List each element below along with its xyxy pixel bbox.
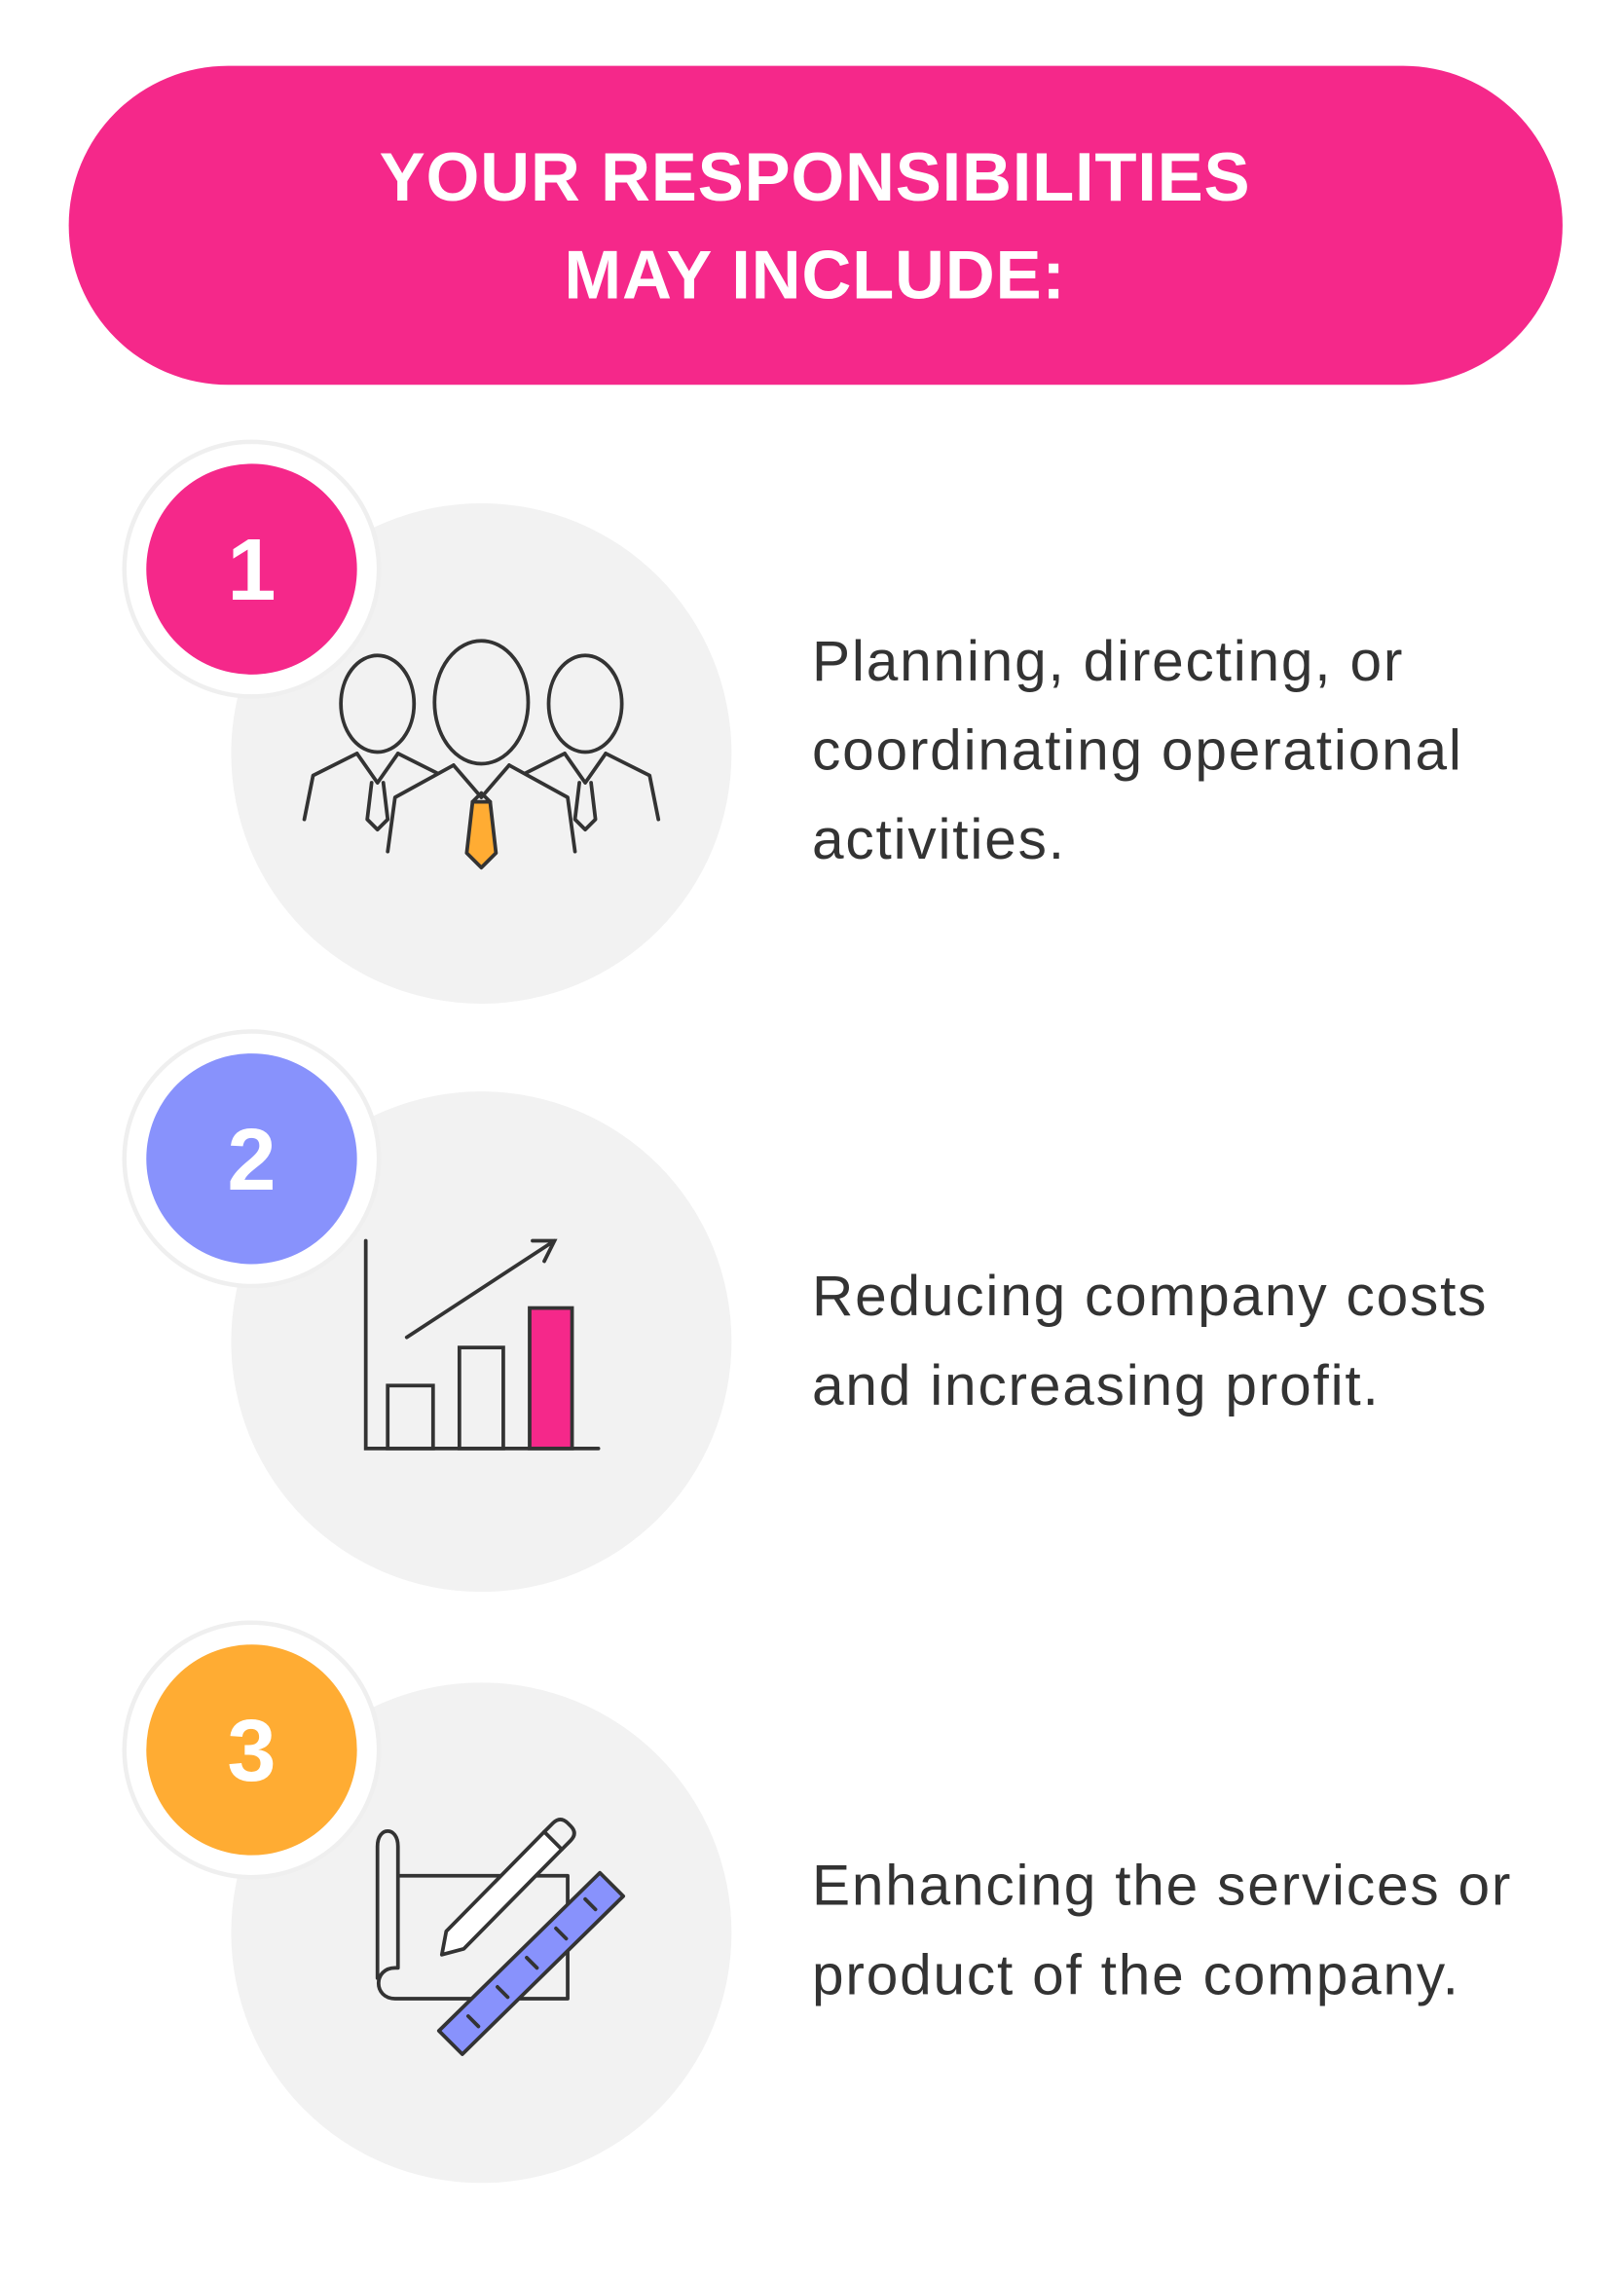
icon: blueprint with pencil and ruler (378, 1820, 623, 2054)
gray circle 1 (231, 503, 731, 1004)
item 1 (125, 442, 1481, 1004)
text 3: Enhancing the services or (812, 1855, 1512, 1918)
number badge 2: 2 (227, 1111, 277, 1209)
item 2 (125, 1032, 1505, 1592)
item 3 (125, 1623, 1530, 2183)
text 2: and increasing profit. (812, 1354, 1381, 1417)
text 2: Reducing company costs (812, 1265, 1488, 1328)
text 1: activities. (812, 808, 1066, 871)
number badge 3 (125, 1623, 379, 1877)
icon: bar chart with arrow (366, 1240, 599, 1449)
number badge 1 (125, 442, 379, 696)
gray circle 3 (231, 1682, 731, 2183)
text 1: coordinating operational (812, 719, 1463, 783)
text 1: Planning, directing, or (812, 630, 1404, 693)
gray circle 2 (231, 1091, 731, 1592)
icon: team of people (305, 641, 658, 867)
text 3: product of the company. (812, 1943, 1460, 2006)
title: YOUR RESPONSIBILITIES (380, 138, 1250, 215)
number badge 2 (125, 1032, 379, 1286)
number badge 1: 1 (227, 521, 277, 619)
header pill: MAY INCLUDE: (564, 237, 1066, 313)
number badge 3: 3 (227, 1702, 277, 1800)
header pill (69, 66, 1563, 385)
